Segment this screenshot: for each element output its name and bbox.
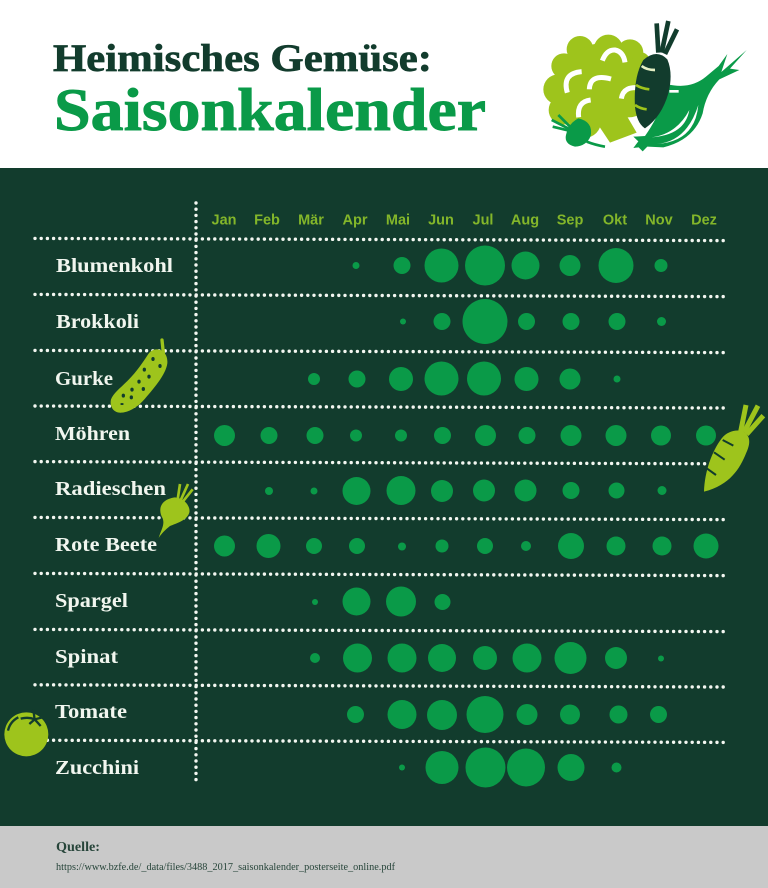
icon: radish <box>159 484 193 538</box>
vegetable labels: Radieschen <box>55 478 166 500</box>
month headers: Apr <box>343 212 368 228</box>
month headers: Feb <box>254 212 280 228</box>
row: Gurke <box>308 362 620 396</box>
row: Brokkoli <box>400 299 666 344</box>
vegetable labels: Spargel <box>55 590 128 612</box>
row: Spargel <box>312 586 450 616</box>
source text: https://www.bzfe.de/_data/files/3488_2017_saisonkalender_posterseite_online.pdf <box>56 862 396 873</box>
vegetable labels: Zucchini <box>55 757 139 779</box>
month headers: Mai <box>386 212 410 228</box>
vegetable labels: Tomate <box>55 701 127 723</box>
month headers: Sep <box>557 212 583 228</box>
vegetable labels: Brokkoli <box>56 311 139 333</box>
month headers: Nov <box>645 212 673 228</box>
row: Spinat <box>310 642 664 674</box>
icon: vegetable group <box>543 21 747 151</box>
month headers: Aug <box>511 212 539 228</box>
month headers: Dez <box>691 212 717 228</box>
month headers: Mär <box>298 212 324 228</box>
month headers: Jan <box>212 212 236 228</box>
month headers: Jul <box>473 212 493 228</box>
row: Rote Beete <box>214 533 718 559</box>
month headers: Okt <box>603 212 627 228</box>
vegetable labels: Spinat <box>55 646 118 668</box>
row: Zucchini <box>399 748 622 788</box>
panel: source footer background <box>0 826 768 888</box>
row: Blumenkohl <box>352 246 668 286</box>
row: Möhren <box>214 425 716 446</box>
title: Heimisches Gemüse: <box>53 37 432 80</box>
vegetable labels: Blumenkohl <box>56 255 173 277</box>
grid lines <box>35 203 724 784</box>
icon: cucumber <box>111 340 167 413</box>
row: Radieschen <box>265 476 666 505</box>
title: Saisonkalender <box>54 77 486 143</box>
vegetable labels: Rote Beete <box>55 534 157 556</box>
icon: tomato <box>4 709 48 756</box>
bubble chart: seasonal availability <box>214 246 718 788</box>
title <box>53 37 486 143</box>
vegetable labels <box>55 255 173 779</box>
source text <box>56 840 396 873</box>
source text: Quelle: <box>56 840 100 855</box>
vegetable labels: Gurke <box>55 368 113 390</box>
row: Tomate <box>347 696 667 733</box>
vegetable labels: Möhren <box>55 423 130 445</box>
icon: carrot <box>704 405 763 492</box>
panel: calendar background <box>0 168 768 826</box>
month headers <box>212 212 717 228</box>
month headers: Jun <box>428 212 454 228</box>
